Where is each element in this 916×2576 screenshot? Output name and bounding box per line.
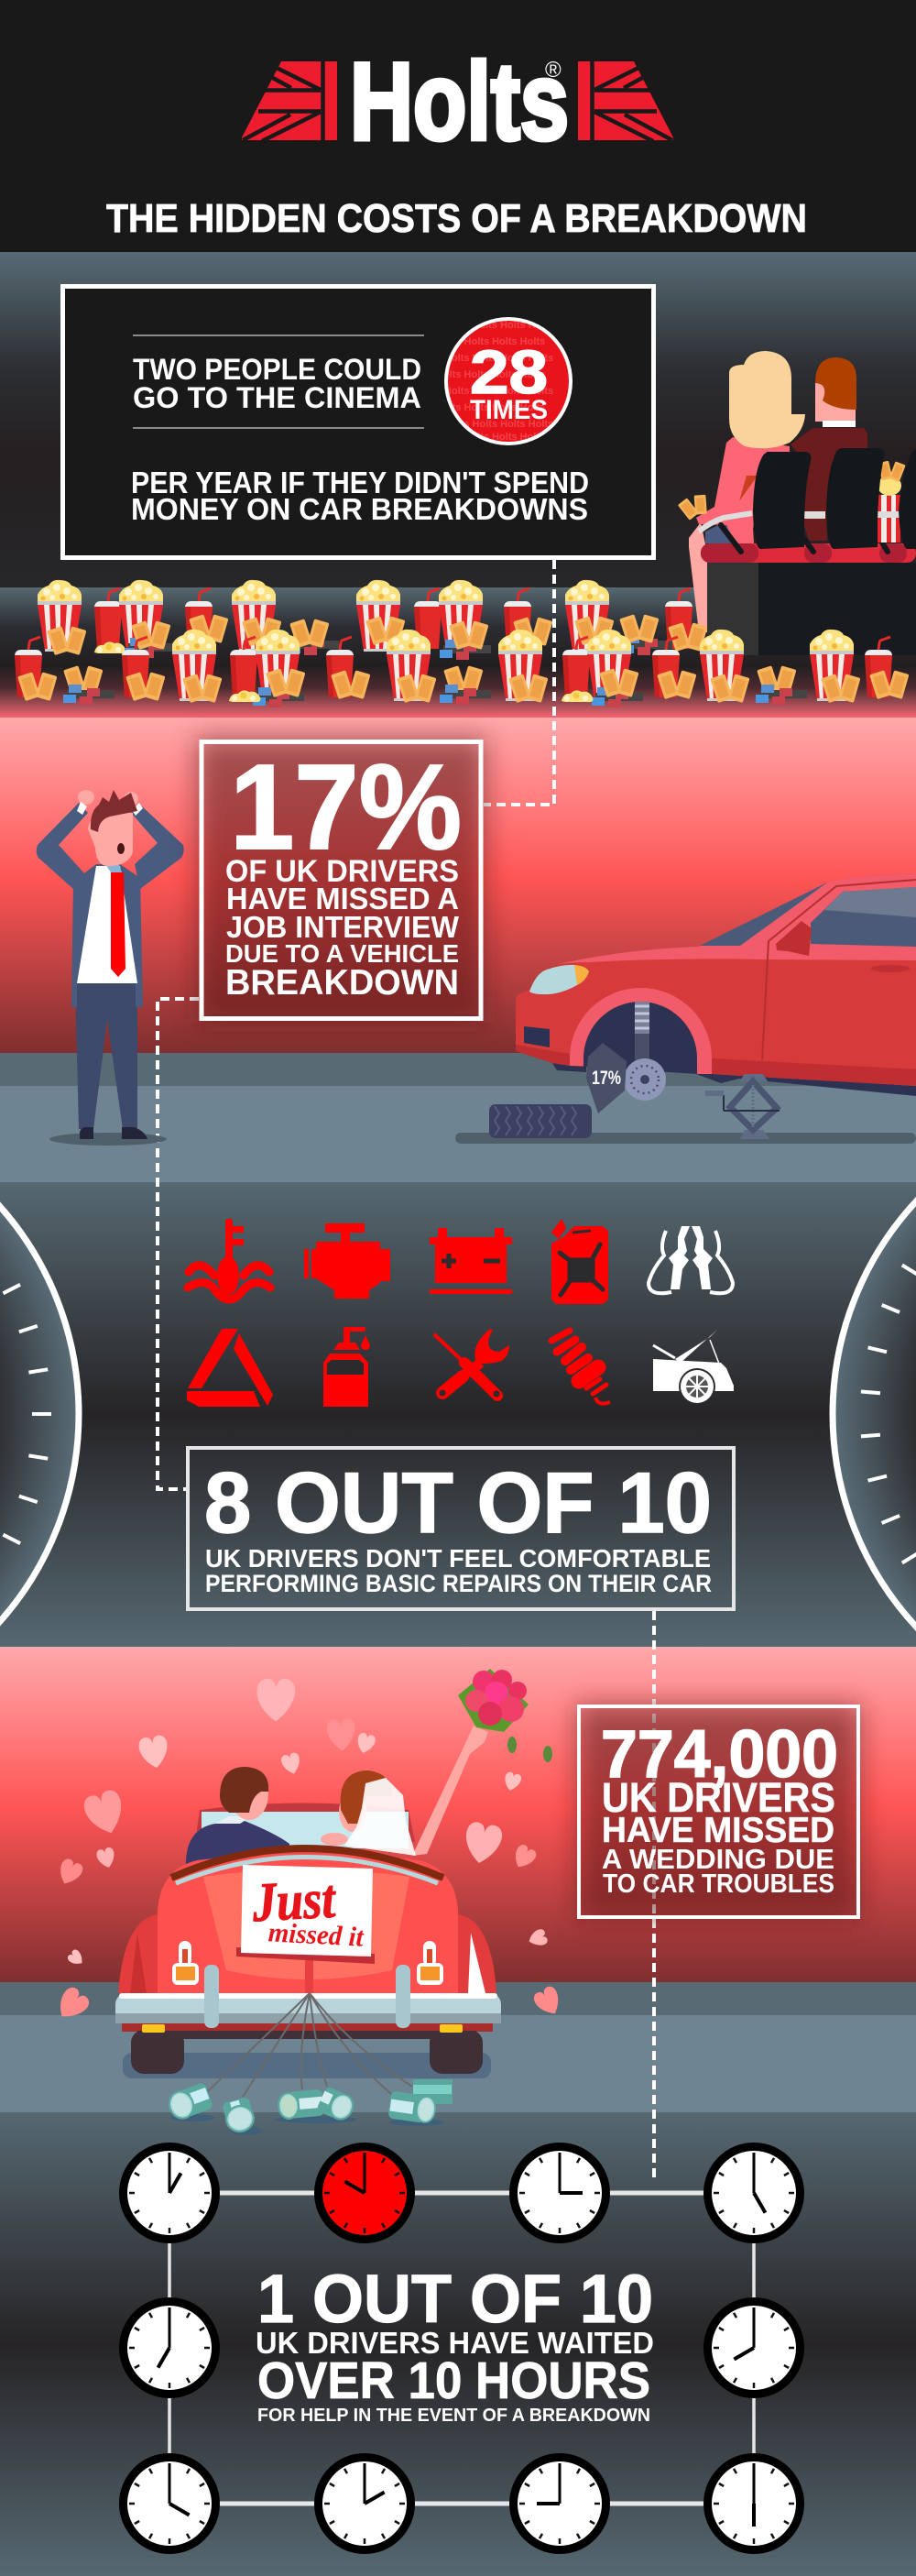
gauge: left speedometer [0,1102,79,1726]
road two [0,1982,916,2112]
statistic text: 1 out of 10: UK DRIVERS HAVE WAITED [256,2326,654,2360]
icon: engine [304,1223,390,1299]
sign: just missed it: missed it [267,1917,365,1953]
tin can [277,2089,324,2121]
text: two people could go to the cinema: GO TO THE CINEMA [133,381,421,414]
text: of UK drivers: OF UK DRIVERS [225,854,459,889]
sign: just missed it: Just [250,1869,338,1933]
clock ring connector lines [169,2193,754,2504]
logo wordmark: Holts [350,40,569,163]
text: wedding description: A WEDDING DUE [602,1843,834,1875]
text: repairs description: PERFORMING BASIC REPAIRS ON THEIR CAR [205,1570,712,1597]
icon: union flag left [242,55,337,147]
text: repairs description: UK DRIVERS DON'T FEEL COMFORTABLE [205,1544,711,1573]
statistic text: 1 out of 10 [256,2261,654,2426]
badge: 28 times: Holts Holts Holts Holts [436,402,545,413]
text: per year: PER YEAR IF THEY DIDN'T SPEND [131,466,589,499]
clock 6: eight o'clock [703,2297,804,2398]
icon: warning triangle [187,1329,273,1407]
badge: 28 times: Holts Holts Holts Holts [444,320,553,331]
panel: 17% job interview statistic [197,738,485,1023]
text: of UK drivers: BREAKDOWN [225,963,459,1003]
statistic text: 1 out of 10: FOR HELP IN THE EVENT OF A BREAKDOWN [257,2406,650,2426]
text: of UK drivers: JOB INTERVIEW [226,910,460,944]
illustration: stressed man in a suit [37,790,184,1145]
badge: 28 times: Holts Holts Holts Holts [436,369,545,380]
illustration: couple in cinema seats [677,351,916,655]
text: of UK drivers [225,854,460,1003]
clock 7: four o'clock [119,2453,220,2554]
tail lights [172,1941,443,1985]
dashed connector: job interview to repairs [158,999,199,1489]
badge: 28 times: Holts Holts Holts Holts [444,353,553,364]
badge: 28 times: Holts Holts Holts Holts [444,386,553,397]
illustration: red car on a jack with a missing wheel [455,873,916,1144]
badge: 28 times: 28 [470,338,548,407]
clock section background [0,2112,916,2576]
clock 2: red ten o'clock [314,2143,415,2243]
title: THE HIDDEN COSTS OF A BREAKDOWN [106,196,807,241]
clock 8: two o'clock [314,2453,415,2554]
badge: 28 times: Holts Holts Holts Holts [436,432,545,443]
clock 3: three o'clock [509,2143,610,2243]
tin can [387,2091,438,2124]
icon: jumper cables [649,1226,733,1293]
icon: coolant temperature [188,1219,270,1299]
gauge: right speedometer [833,1102,916,1726]
text: two people could go to the cinema: TWO PEOPLE COULD [133,353,421,386]
decorative hearts [51,1679,565,2025]
cinema floor background [0,587,916,718]
text: wedding description: UK DRIVERS [602,1774,835,1821]
clock 5: seven o'clock [119,2297,220,2398]
statistic text: 1 out of 10: 1 OUT OF 10 [257,2261,653,2337]
icon: car with open boot [653,1330,734,1405]
page header background [0,0,916,252]
pink wall background two [0,1647,916,1982]
icon: union flag right [578,55,673,147]
text: wedding description: TO CAR TROUBLES [603,1869,834,1899]
text: repairs description [205,1544,712,1597]
badge: 28 times: TIMES [470,395,548,425]
text: per year [131,466,589,526]
clock 10: six o'clock [703,2453,804,2554]
bride and groom [186,1726,488,1865]
statistic text: 1 out of 10: OVER 10 HOURS [257,2351,650,2410]
chart: 17% pie wedge [586,1043,627,1113]
pink wall background one [0,718,916,1053]
clock 1: one o'clock [119,2143,220,2243]
tin can [164,2081,214,2123]
road one [0,1053,916,1182]
statistic: 8 out of 10: 8 OUT OF 10 [204,1454,712,1551]
icon: removed tyre [489,1104,592,1138]
divider lines [133,335,424,428]
text: two people could go to the cinema [133,353,421,414]
chart: 17% pie wedge: 17% [592,1068,621,1089]
dashed connector: cinema to job interview [484,560,554,805]
dashed connector: repairs to clocks [652,1611,656,2183]
text: of UK drivers: DUE TO A VEHICLE [225,939,459,968]
panel: 774,000 wedding statistic [577,1705,860,1919]
Holts logo [242,40,673,163]
icon: oil can [323,1327,370,1407]
clock 9: nine o'clock [509,2453,610,2554]
tin can box [413,2079,453,2104]
icon: battery [430,1228,512,1294]
registered mark: ® [545,58,562,82]
badge: 28 times: Holts Holts Holts Holts [444,419,553,430]
tin can [316,2085,358,2124]
text: of UK drivers: HAVE MISSED A [226,882,459,915]
statistic: 774,000: 774,000 [601,1717,838,1792]
cinema section background [0,252,916,587]
icon: fuel can [551,1219,608,1304]
icon: suspension spring [551,1331,610,1404]
clock 4: five o'clock [703,2143,804,2243]
text: wedding description [602,1774,835,1899]
illustration: rows of popcorn, drinks, tickets and 3D glasses [15,580,910,707]
bouquet [458,1669,552,1762]
strings and tin cans [164,1993,453,2136]
sign: just missed it [236,1865,375,1964]
icon: spanner and screwdriver [435,1329,509,1397]
badge: 28 times: Holts Holts Holts Holts [436,336,545,347]
panel: cinema statistic [62,286,654,557]
dashboard section background [0,1182,916,1647]
tin can [221,2097,257,2136]
panel: 8 out of 10 statistic [188,1448,734,1609]
icon: car jack [705,1074,780,1139]
statistic: 17%: 17% [230,740,462,874]
illustration: wedding car [115,1669,552,2136]
bumper [115,1965,501,2039]
badge: 28 times [436,317,572,445]
text: per year: MONEY ON CAR BREAKDOWNS [131,492,588,526]
icon grid: car warning symbols [187,1219,734,1407]
text: wedding description: HAVE MISSED [602,1811,834,1850]
